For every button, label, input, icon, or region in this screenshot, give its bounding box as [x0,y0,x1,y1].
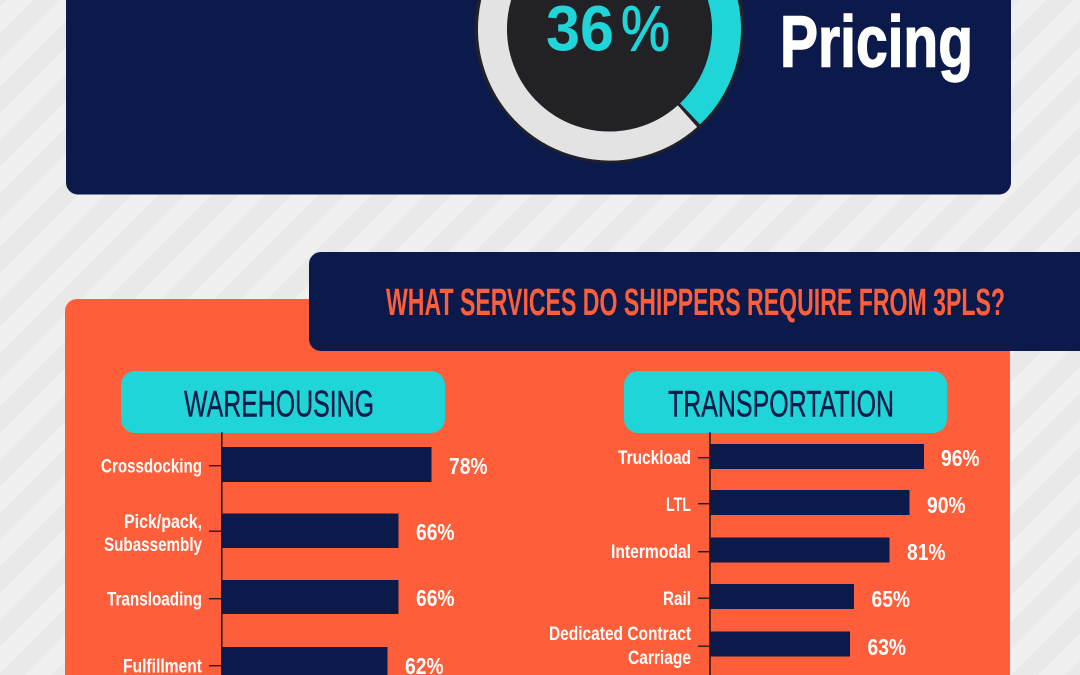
bar: Crossdocking 78%: Crossdocking [101,456,202,478]
bar: Transloading 66%: 66% [416,585,454,611]
bar: LTL 90%: LTL [666,495,691,516]
bar: Fulfillment 62% [123,647,444,675]
bar: Intermodal 81% [611,538,946,565]
bar: Intermodal 81%: Intermodal [611,542,691,563]
warehousing heading [121,371,445,433]
panel: services required [65,252,1080,675]
bar: Crossdocking 78% [101,447,488,482]
bar: LTL 90%: 90% [927,492,966,518]
panel: pricing stat [66,0,1011,194]
bar: Pick/pack, Subassembly 66%: Pick/pack, [124,512,202,533]
transportation heading: TRANSPORTATION [668,384,894,424]
bar: Transloading 66%: Transloading [107,590,202,610]
bar: Dedicated Contract Carriage 63% [549,624,906,669]
bar: Rail 65%: 65% [872,586,910,612]
bar: Intermodal 81%: 81% [907,539,946,565]
warehousing heading: WAREHOUSING [184,384,374,424]
bar: Truckload 96%: Truckload [618,448,691,469]
donut chart: 36% [474,0,744,163]
bar: Crossdocking 78%: 78% [449,453,488,479]
section title banner [309,252,1080,351]
chart: transportation [549,371,980,675]
bar: Dedicated Contract Carriage 63%: Carriage [628,648,691,669]
bar: Dedicated Contract Carriage 63%: Dedicated Contract [549,624,692,645]
bar: Rail 65%: Rail [663,589,691,610]
bar: Pick/pack, Subassembly 66%: 66% [416,519,454,545]
bar: Dedicated Contract Carriage 63%: 63% [868,634,906,660]
chart: warehousing [101,371,488,675]
bar: Rail 65% [663,584,910,612]
bar: Pick/pack, Subassembly 66%: Subassembly [104,535,202,556]
donut value [546,0,670,64]
bar: LTL 90% [666,490,966,518]
bar: Truckload 96% [618,444,980,471]
transportation heading [624,371,947,433]
bar: Pick/pack, Subassembly 66% [104,512,454,556]
bar: Transloading 66% [107,580,454,614]
heading: Pricing: Pricing [780,2,973,82]
bar: Truckload 96%: 96% [941,445,980,471]
